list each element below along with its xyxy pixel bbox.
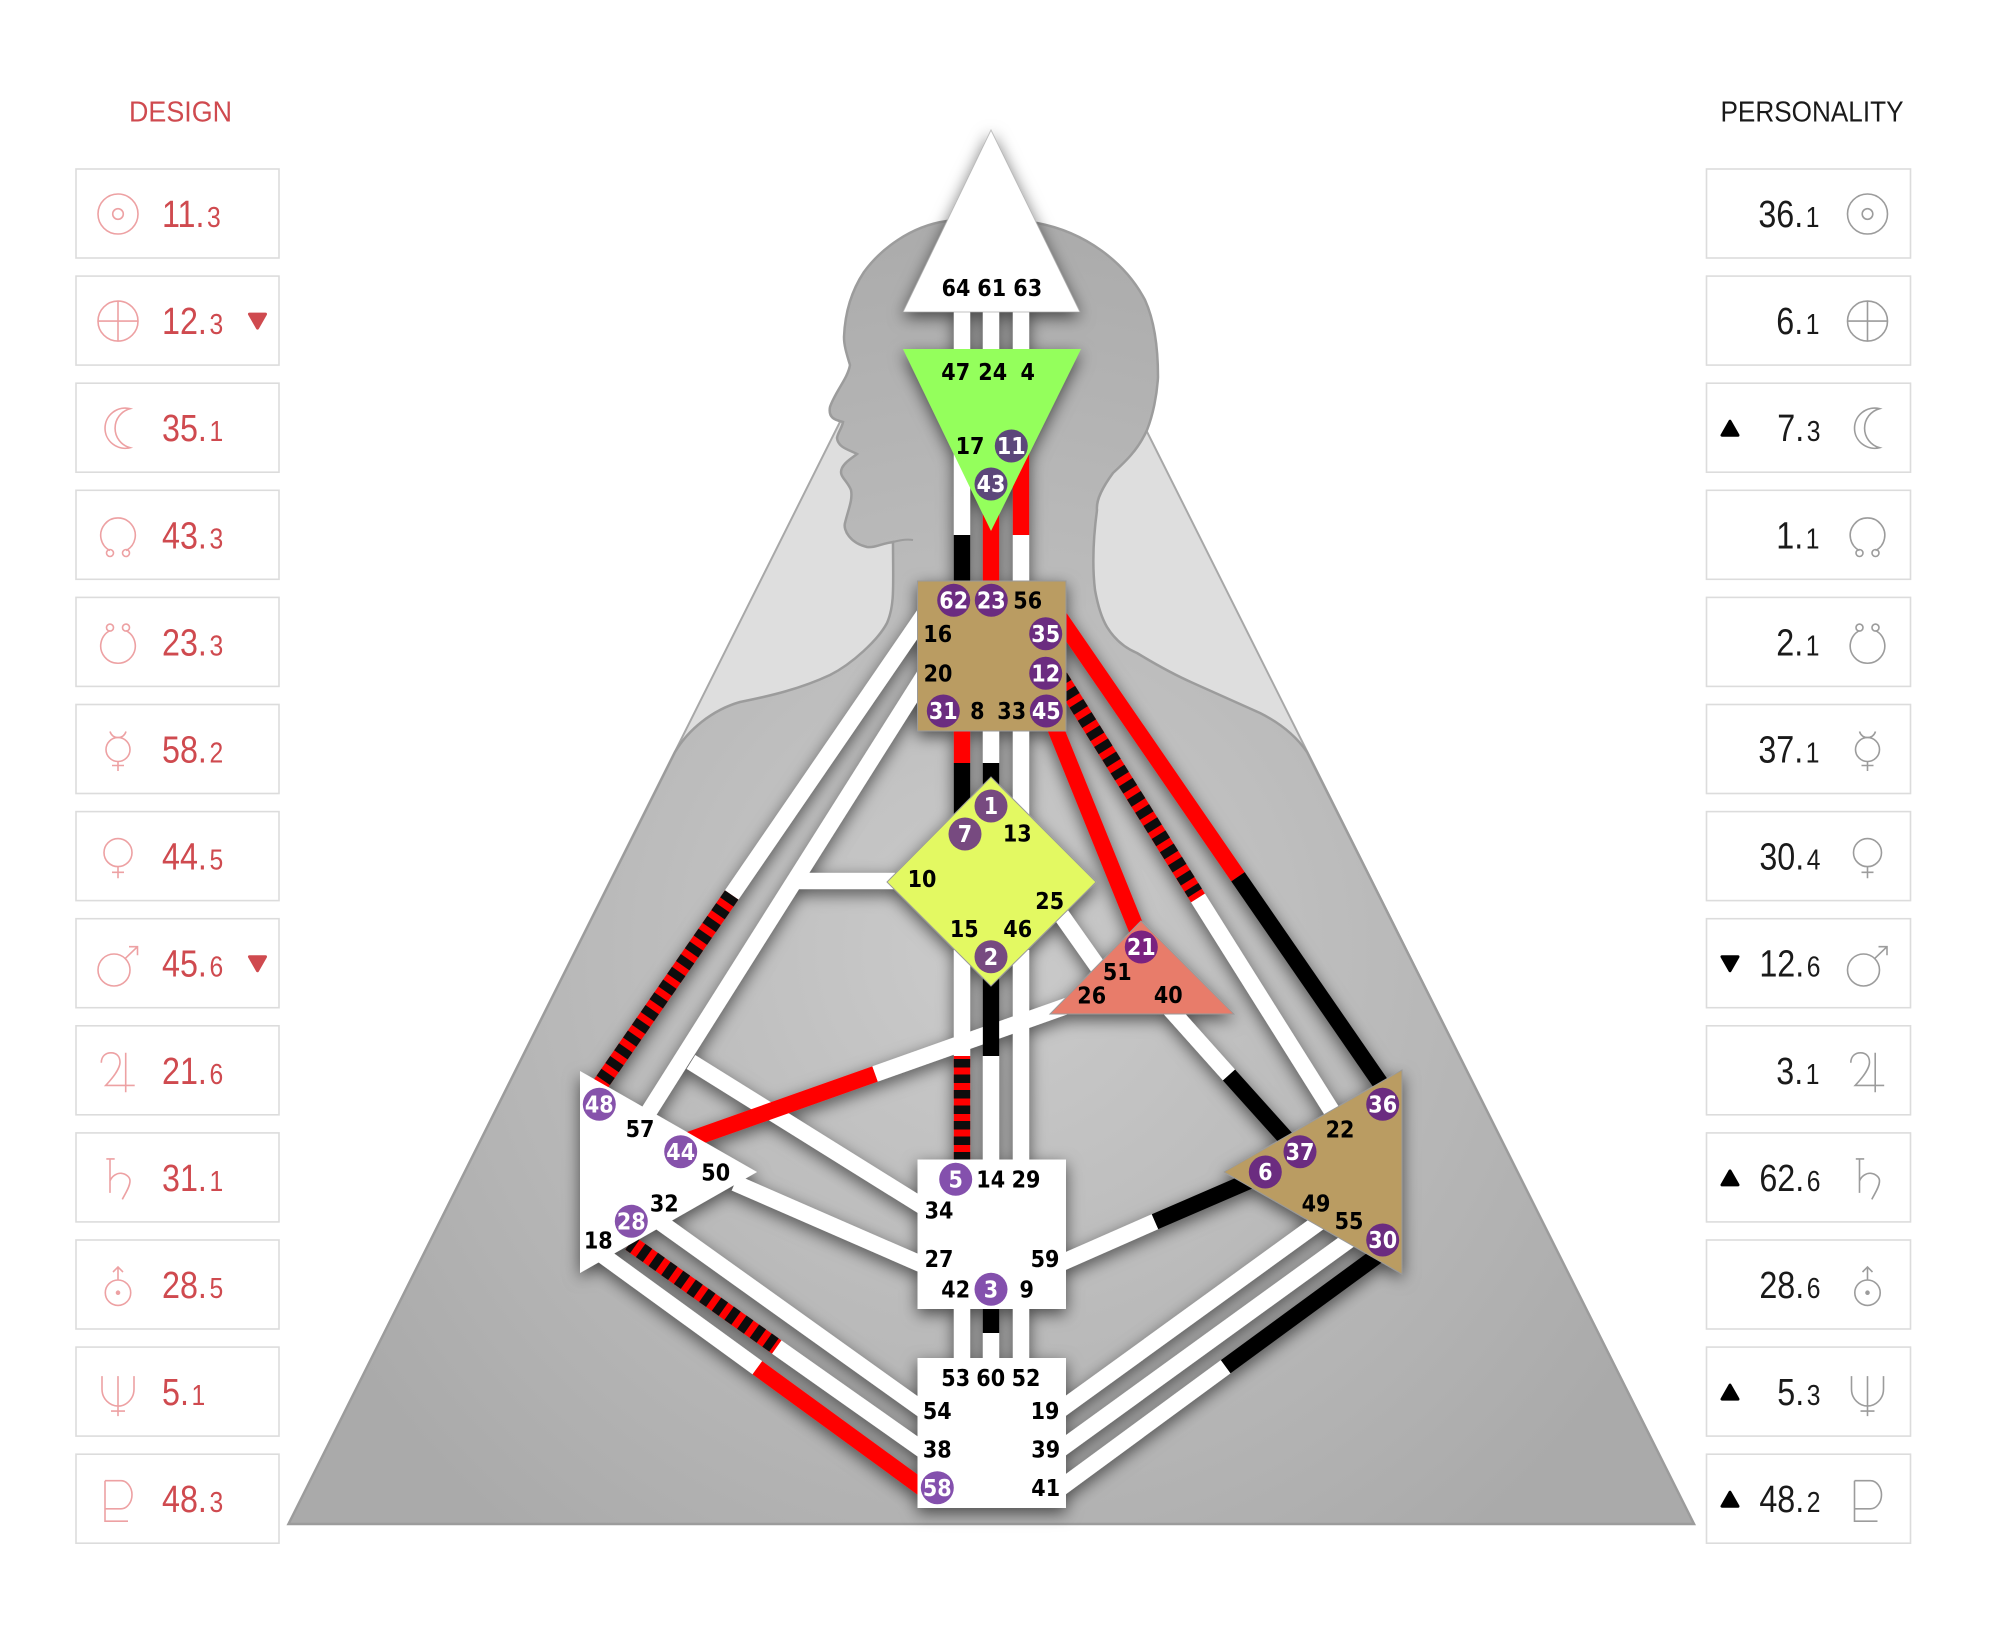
- gates: ajna: 24: [978, 360, 1007, 386]
- gate 43 active: [974, 468, 1008, 500]
- gate 28 active: [615, 1205, 648, 1238]
- gate 37 active: [1284, 1135, 1316, 1168]
- channel 64-47: [954, 305, 970, 590]
- gate 43 active: 43: [977, 472, 1005, 498]
- gate 35 active: 35: [1031, 622, 1060, 648]
- personality row: mars 12.6: 12.6: [1759, 943, 1821, 985]
- gate 37 active: 37: [1286, 1140, 1314, 1166]
- gates: root: 41: [1031, 1476, 1060, 1502]
- design row: venus 44.5: [76, 812, 279, 901]
- gates: ajna: 17: [956, 434, 984, 460]
- gate 6 active: 6: [1258, 1160, 1273, 1186]
- design row: earth 12.3: [76, 276, 279, 365]
- channel 9-52: [1013, 1300, 1029, 1365]
- design row: mercury 58.2: [76, 704, 279, 794]
- channels: [590, 305, 1390, 1490]
- gate 7 active: 7: [958, 822, 972, 848]
- personality row: venus 30.4: 30.4: [1759, 836, 1821, 878]
- gates: ego: 26: [1077, 984, 1106, 1010]
- channel 12-22: [1060, 677, 1340, 1124]
- personality row: sun 36.1: 36.1: [1758, 194, 1820, 236]
- gate 1 active: [974, 790, 1008, 822]
- personality row: north node 1.1: [1706, 490, 1910, 579]
- gate 12 active: 12: [1031, 662, 1060, 688]
- design row: south node 23.3: [76, 597, 279, 686]
- personality row: neptune 5.3: 5.3: [1777, 1372, 1820, 1414]
- gates: G: 15: [950, 917, 979, 943]
- personality row: saturn 62.6: [1706, 1133, 1910, 1222]
- gate 48 active: 48: [585, 1092, 614, 1118]
- gate 5 active: 5: [948, 1168, 963, 1194]
- gates: sacral: 29: [1012, 1168, 1040, 1194]
- channel 26-44: [690, 1000, 1085, 1140]
- design row: saturn 31.1: [76, 1133, 279, 1222]
- gates: throat: 33: [997, 699, 1026, 725]
- channel 3-60: [983, 1300, 999, 1365]
- gate 62 active: 62: [939, 588, 968, 614]
- gate 21 active: [1125, 930, 1158, 964]
- gates: solar plexus: [1302, 1118, 1363, 1235]
- gate 45 active: 45: [1032, 699, 1061, 725]
- gates: root: 19: [1031, 1399, 1059, 1425]
- center: ego: [1050, 921, 1234, 1014]
- gate 62 active: [937, 584, 970, 617]
- gate 2 active: [974, 940, 1008, 973]
- gates: throat: [923, 588, 1042, 725]
- gates: spleen: [584, 1117, 730, 1254]
- gates: sacral: 59: [1031, 1247, 1059, 1273]
- channel 33-13: [1013, 725, 1029, 830]
- gates: head: 63: [1013, 276, 1042, 302]
- channel 27-50: [735, 1183, 930, 1268]
- gate 45 active: [1030, 694, 1063, 728]
- gate 31 active: 31: [929, 699, 958, 725]
- gate 5 active: [939, 1163, 972, 1196]
- gates: throat: 56: [1013, 588, 1042, 614]
- gates: solar plexus: 55: [1335, 1209, 1363, 1235]
- center: spleen: [580, 1071, 757, 1273]
- gates: root: 60: [976, 1366, 1005, 1392]
- body silhouette: [288, 221, 1694, 1524]
- gates: root: 52: [1012, 1366, 1040, 1392]
- personality row: moon 7.3: [1706, 383, 1910, 472]
- gates: throat: 16: [923, 622, 952, 648]
- gate 58 active: [921, 1471, 954, 1504]
- channel 58-18: [590, 1246, 925, 1490]
- personality row: moon 7.3: 7.3: [1777, 408, 1820, 450]
- design row: mercury 58.2: 58.2: [162, 729, 223, 771]
- gate 28 active: 28: [617, 1210, 646, 1236]
- gate 7 active: [948, 818, 982, 850]
- design row: venus 44.5: 44.5: [162, 836, 223, 878]
- gate 12 active: [1029, 657, 1062, 690]
- personality row: jupiter 3.1: 3.1: [1776, 1050, 1820, 1092]
- design row: uranus 28.5: [76, 1240, 279, 1329]
- design row: mars 45.6: 45.6: [162, 943, 223, 985]
- gates: root: 54: [923, 1399, 952, 1425]
- gates: root: 53: [941, 1366, 970, 1392]
- gates: throat: 8: [970, 699, 985, 725]
- gate 1 active: 1: [984, 794, 998, 820]
- channel 63-4: [1013, 305, 1029, 590]
- design row: mars 45.6: [76, 919, 279, 1008]
- personality row: neptune 5.3: [1706, 1347, 1910, 1436]
- panel: design column: [76, 169, 279, 1543]
- personality row: venus 30.4: [1706, 812, 1910, 901]
- personality row: pluto 48.2: [1706, 1454, 1910, 1543]
- design row: moon 35.1: [76, 383, 279, 472]
- channel 10 connection: [794, 873, 895, 889]
- channel 61-24: [983, 305, 999, 590]
- bodygraph: channels and centers with shadow: [580, 130, 1402, 1508]
- gates: G: 10: [908, 867, 936, 893]
- gate 36 active: 36: [1368, 1092, 1397, 1118]
- channel 20-57: [630, 666, 930, 1142]
- channel 19-49: [1060, 1218, 1325, 1410]
- design row: north node 43.3: [76, 490, 279, 579]
- channel 46-29: [1013, 950, 1029, 1165]
- channel 54-32: [660, 1222, 925, 1412]
- design row: moon 35.1: 35.1: [162, 408, 223, 450]
- center: throat: [918, 581, 1066, 731]
- gates: root: 38: [923, 1438, 952, 1464]
- gates: G: [908, 822, 1064, 943]
- heading: design: DESIGN: [129, 96, 232, 128]
- gates: sacral: [925, 1168, 1059, 1304]
- gates: head: 64: [942, 276, 970, 302]
- design row: pluto 48.3: [76, 1454, 279, 1543]
- gate 23 active: [975, 584, 1008, 617]
- personality row: uranus 28.6: 28.6: [1759, 1265, 1821, 1307]
- gate 11 active: [995, 430, 1028, 462]
- channel 31-7: [954, 725, 970, 830]
- gates: solar plexus: 49: [1302, 1192, 1330, 1218]
- gates: sacral: 27: [925, 1247, 953, 1273]
- design row: sun 11.3: [76, 169, 279, 258]
- gates: G: 13: [1003, 822, 1032, 848]
- gate 23 active: 23: [977, 588, 1006, 614]
- gates: sacral: 42: [941, 1278, 970, 1304]
- gate 31 active: [927, 694, 960, 728]
- design row: jupiter 21.6: 21.6: [162, 1050, 223, 1092]
- gates: sacral: 34: [925, 1198, 953, 1224]
- gate 3 active: 3: [984, 1278, 998, 1304]
- gates: solar plexus: 22: [1326, 1118, 1354, 1144]
- personality row: earth 6.1: [1706, 276, 1910, 365]
- center: head: [903, 130, 1080, 312]
- gates: ego: 40: [1154, 983, 1183, 1009]
- gate 21 active: 21: [1127, 935, 1156, 961]
- heading: personality: PERSONALITY: [1720, 96, 1904, 128]
- channel 21-45: [1052, 720, 1141, 940]
- gates: ego: [1077, 960, 1183, 1010]
- gate 30 active: [1366, 1224, 1399, 1256]
- channel 59-6: [1060, 1172, 1270, 1264]
- gate 2 active: 2: [984, 945, 998, 971]
- design row: south node 23.3: 23.3: [162, 622, 223, 664]
- channel 40-37: [1170, 1009, 1300, 1154]
- gate 58 active: 58: [923, 1476, 952, 1502]
- channel 2-14: [983, 970, 999, 1165]
- channel 35-36: [1060, 618, 1390, 1097]
- design row: uranus 28.5: 28.5: [162, 1265, 223, 1307]
- gates: sacral: 14: [976, 1168, 1005, 1194]
- gates: spleen: 50: [701, 1160, 730, 1186]
- personality row: earth 6.1: 6.1: [1776, 301, 1820, 343]
- gates: G: 25: [1035, 889, 1064, 915]
- panel: personality column: [1706, 169, 1910, 1543]
- channel 8-1: [983, 725, 999, 800]
- gate 44 active: [664, 1135, 697, 1168]
- gates: ajna: 47: [941, 360, 970, 386]
- design row: pluto 48.3: 48.3: [162, 1479, 223, 1521]
- channel 42-53: [954, 1300, 970, 1365]
- channel 16-48: [600, 606, 930, 1085]
- background triangle: upper light area: [288, 240, 1694, 1524]
- channel 38-28: [630, 1243, 925, 1452]
- gates: root: 39: [1031, 1438, 1060, 1464]
- design row: earth 12.3: 12.3: [162, 301, 223, 343]
- design row: jupiter 21.6: [76, 1026, 279, 1115]
- gates: root: [923, 1366, 1060, 1502]
- gate 44 active: 44: [666, 1140, 695, 1166]
- gates: ajna: 4: [1020, 360, 1035, 386]
- gates: sacral: 9: [1019, 1278, 1034, 1304]
- personality row: north node 1.1: 1.1: [1776, 515, 1820, 557]
- gates: spleen: 18: [584, 1228, 613, 1254]
- personality row: mercury 37.1: 37.1: [1758, 729, 1820, 771]
- gates: G: 46: [1003, 917, 1032, 943]
- gate 3 active: [974, 1273, 1008, 1306]
- gates: spleen: 32: [650, 1192, 679, 1218]
- gates: spleen: 57: [626, 1117, 654, 1143]
- personality row: south node 2.1: 2.1: [1776, 622, 1820, 664]
- center: solar plexus: [1224, 1070, 1402, 1274]
- center: root: [918, 1358, 1066, 1508]
- channel 34-57: [691, 1062, 930, 1211]
- jaw line: [893, 540, 913, 542]
- design row: saturn 31.1: 31.1: [162, 1157, 223, 1200]
- center: G: [887, 777, 1096, 986]
- gate 11 active: 11: [997, 434, 1026, 460]
- design row: north node 43.3: 43.3: [162, 515, 223, 557]
- gate 48 active: [583, 1088, 616, 1121]
- gate 36 active: [1366, 1088, 1399, 1121]
- personality row: uranus 28.6: [1706, 1240, 1910, 1329]
- center: sacral: [918, 1160, 1066, 1309]
- personality row: south node 2.1: [1706, 597, 1910, 686]
- personality row: pluto 48.2: 48.2: [1759, 1479, 1821, 1521]
- gates: throat: 20: [924, 662, 952, 688]
- gates: ego: 51: [1103, 960, 1132, 986]
- channel 15-5: [954, 950, 970, 1165]
- center: ajna: [903, 349, 1081, 531]
- channel 39-55: [1060, 1235, 1356, 1450]
- design row: neptune 5.1: [76, 1347, 279, 1436]
- gates: ajna: [941, 360, 1035, 460]
- gate 35 active: [1029, 617, 1062, 650]
- gates: head: 61: [977, 276, 1006, 302]
- personality row: mercury 37.1: [1706, 704, 1910, 794]
- channel 41-30: [1060, 1250, 1385, 1488]
- design row: neptune 5.1: 5.1: [162, 1372, 205, 1414]
- gate 30 active: 30: [1368, 1228, 1397, 1254]
- channel 25-51: [1050, 899, 1105, 977]
- gate 6 active: [1249, 1156, 1282, 1188]
- design row: sun 11.3: 11.3: [162, 194, 221, 236]
- personality row: jupiter 3.1: [1706, 1026, 1910, 1115]
- personality row: mars 12.6: [1706, 919, 1910, 1008]
- gates: head: [942, 276, 1042, 302]
- personality row: saturn 62.6: 62.6: [1759, 1157, 1821, 1200]
- personality row: sun 36.1: [1706, 169, 1910, 258]
